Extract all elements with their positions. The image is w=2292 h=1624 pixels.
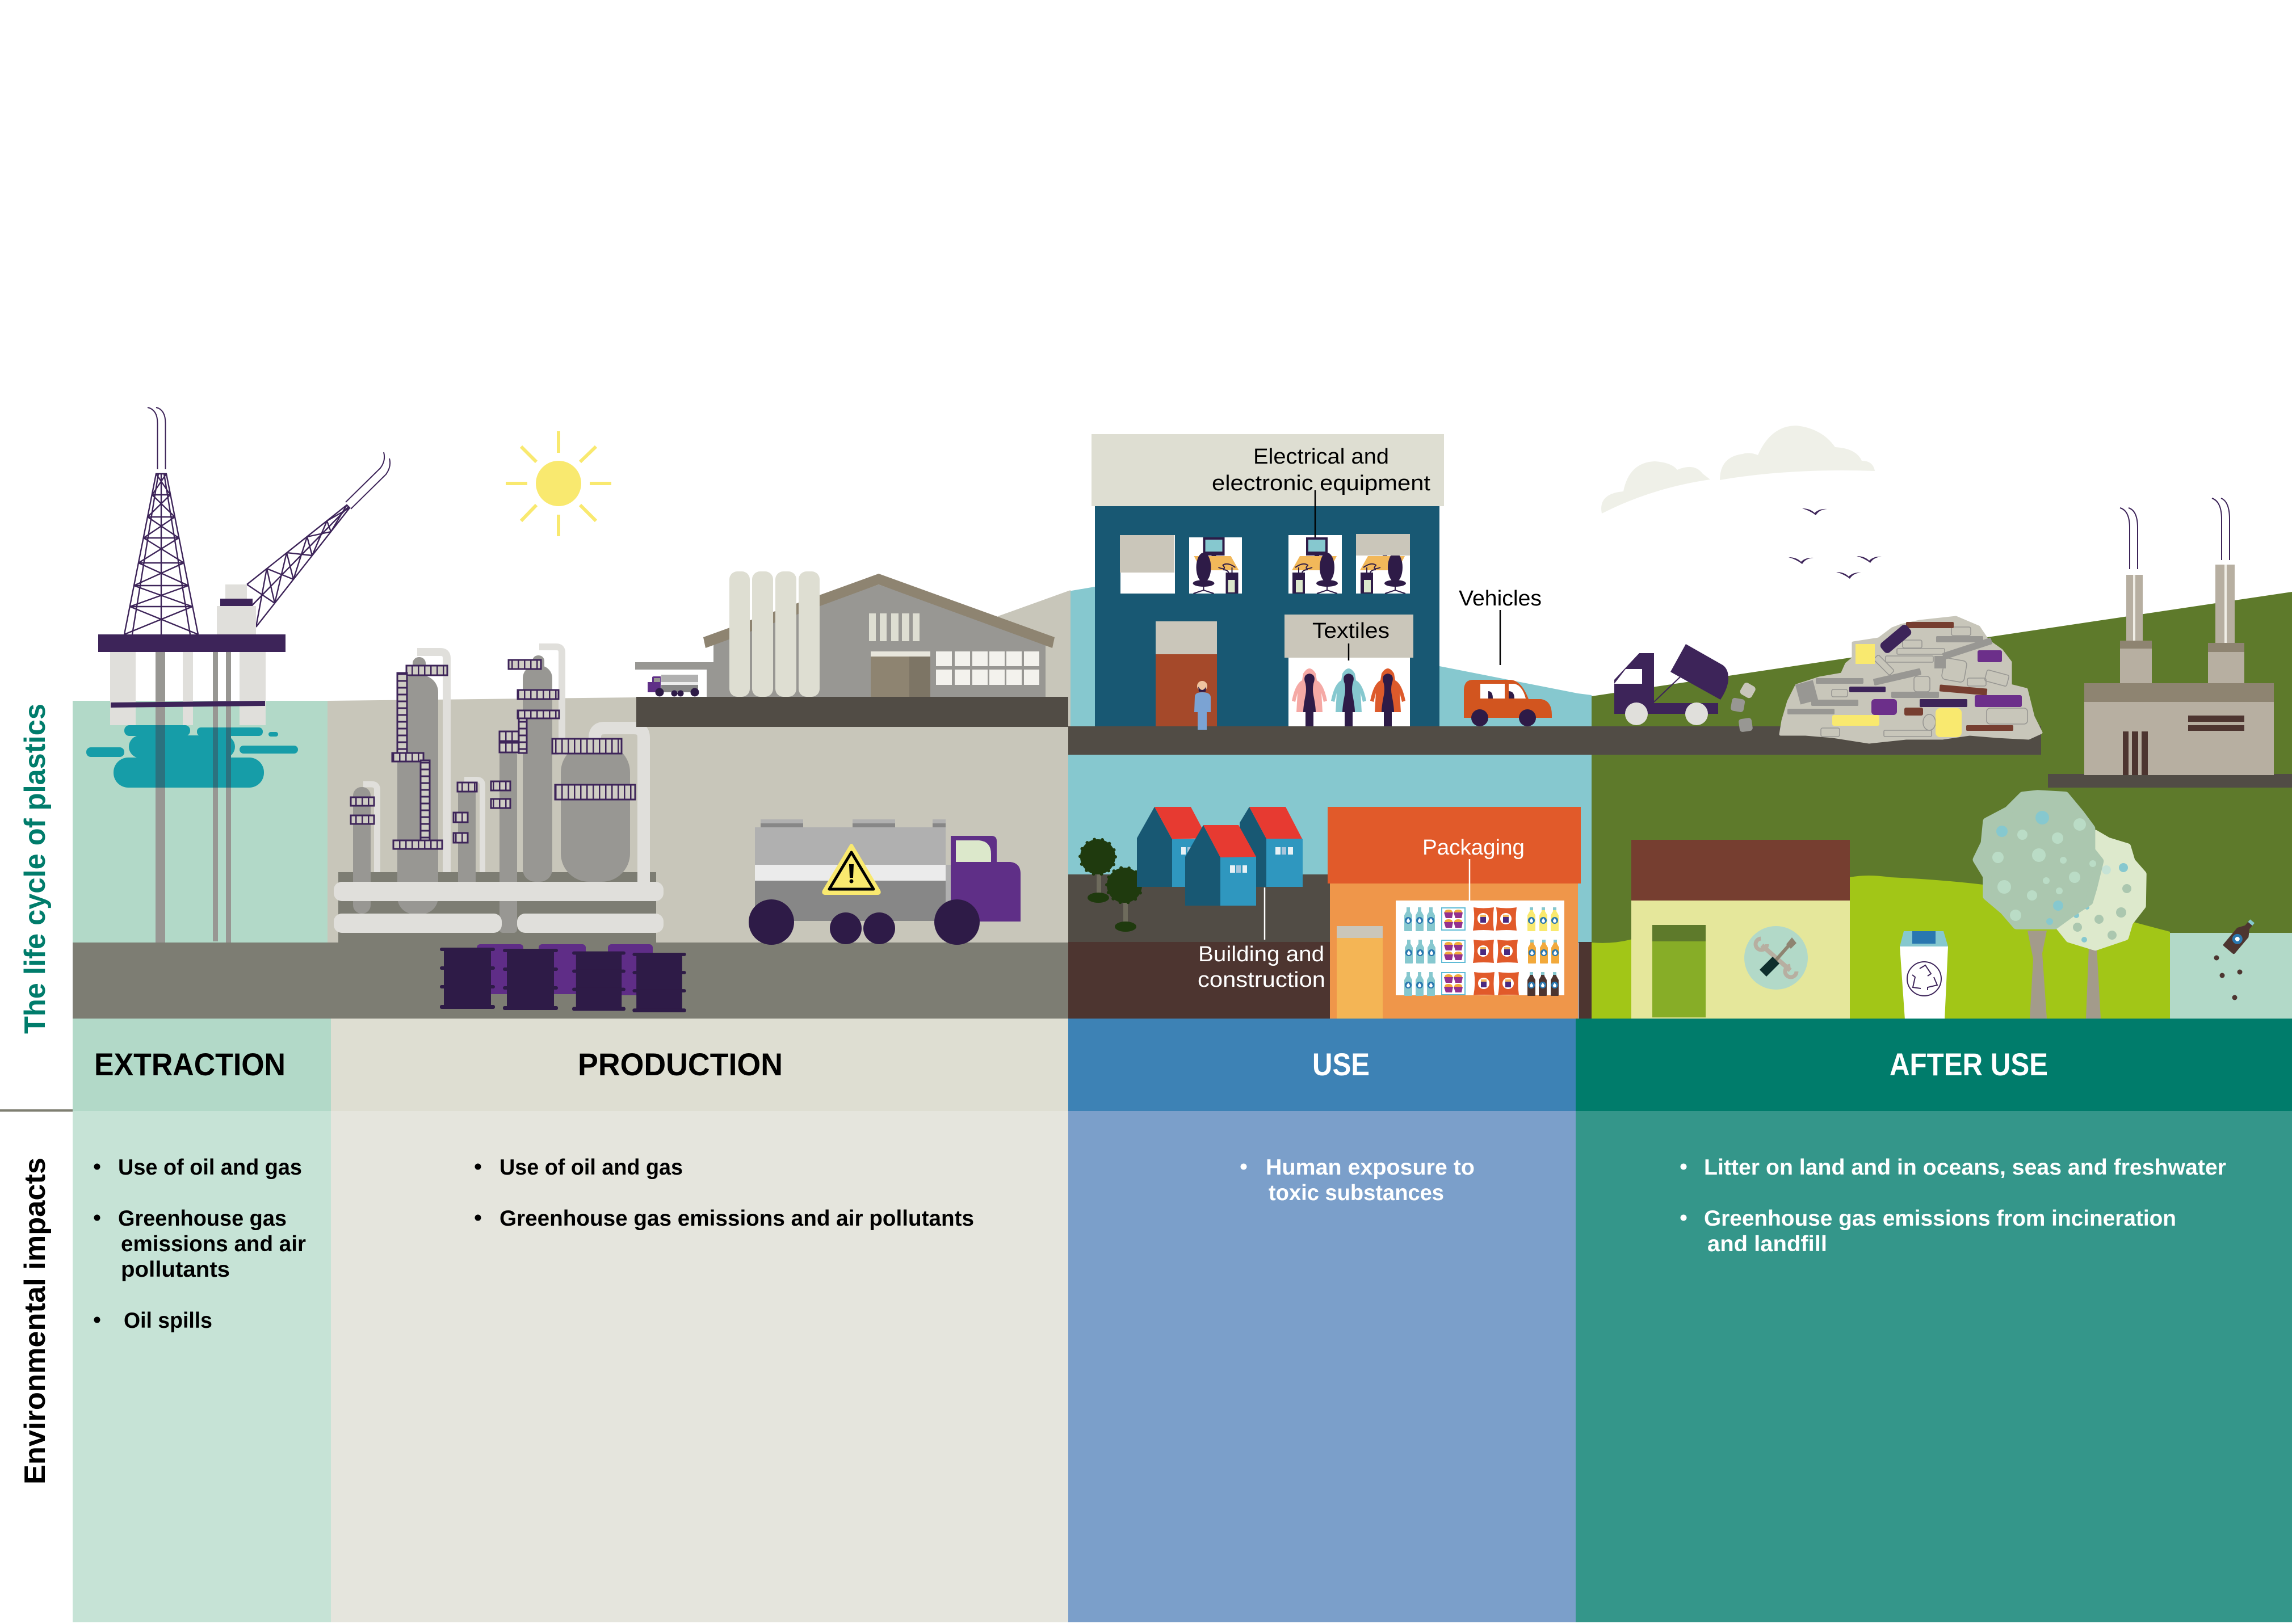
tanker cab — [951, 836, 1021, 922]
repair shop walls — [1631, 901, 1850, 1019]
grey waste items — [1787, 636, 1993, 714]
window: computer right — [1356, 534, 1410, 594]
jacket teal — [1331, 668, 1366, 726]
textile sign — [1284, 615, 1413, 658]
houses — [1137, 807, 1303, 906]
panel: after use column — [1576, 1019, 2292, 1622]
waste pile — [1781, 617, 2041, 742]
derrick tower — [124, 474, 198, 634]
impacts: production: Greenhouse gas emissions and air pollutants — [499, 1206, 974, 1231]
shop door — [1337, 926, 1383, 1019]
oil rig — [98, 407, 390, 943]
yellow bottles — [1527, 907, 1559, 931]
refinery — [334, 647, 664, 943]
rig drill pipes — [156, 652, 231, 943]
shop roof — [1328, 807, 1581, 883]
crane exhaust — [346, 452, 390, 509]
dark front barrels — [440, 948, 686, 1012]
icon: hazard warning sign — [824, 845, 879, 893]
window with blind — [1120, 535, 1175, 594]
after use header — [1576, 1019, 2292, 1111]
refinery back pipes — [363, 647, 562, 872]
impacts: after use: Litter on land and in oceans, seas and freshwater — [1704, 1155, 2226, 1180]
repair shop roof — [1631, 840, 1850, 901]
factory body — [713, 584, 1046, 697]
icon: sun — [506, 431, 611, 536]
impacts: use: Human exposure to — [1266, 1155, 1475, 1180]
small pale tree — [2058, 833, 2143, 1019]
factory vents — [869, 613, 920, 641]
refinery base plate — [338, 872, 656, 943]
pile mound — [1781, 617, 2041, 742]
falling debris — [1730, 681, 1757, 733]
side heading: the life cycle of plastics: The life cycle of plastics — [19, 704, 52, 1034]
littered bottle and fragments — [2214, 916, 2258, 1000]
shop door — [1156, 621, 1217, 726]
tanker wheels — [749, 899, 980, 945]
tanker hatches — [761, 819, 946, 827]
purple back barrels — [477, 944, 653, 995]
after use body — [1576, 1111, 2292, 1622]
derrick exhaust — [148, 407, 166, 469]
production body — [331, 1111, 1068, 1622]
label: vehicles: Vehicles — [1459, 587, 1542, 611]
impacts: extraction: Greenhouse gas — [118, 1206, 287, 1231]
recycling bin — [1900, 931, 1948, 1020]
crane boom — [247, 505, 350, 627]
panel: use backdrop — [1068, 587, 1592, 943]
side heading: environmental impacts: Environmental impacts — [19, 1158, 52, 1484]
production header — [331, 1019, 1068, 1111]
hill behind factory — [998, 590, 1071, 727]
rig band — [111, 701, 265, 708]
label: building and construction — [1198, 887, 1325, 992]
truck cab — [1614, 653, 1718, 714]
use body — [1068, 1111, 1576, 1622]
office building — [1092, 434, 1444, 730]
coloured waste items — [1832, 622, 2022, 737]
impacts: use: toxic substances — [1269, 1181, 1444, 1205]
label: electrical and electronic equipment — [1212, 445, 1430, 537]
snack bags — [1473, 907, 1519, 995]
shop shelf — [1396, 901, 1564, 996]
label: building and construction: Building and — [1198, 943, 1324, 966]
grey sea floor — [73, 943, 1068, 1019]
brown bottles — [1527, 972, 1559, 996]
factory ground — [636, 697, 1068, 727]
truck wheels — [1625, 702, 1708, 725]
panel: after-use green hill — [1592, 592, 2292, 1019]
textile shop window — [1284, 615, 1413, 726]
impacts: after use: and landfill — [1707, 1232, 1827, 1256]
truck bed — [1670, 644, 1728, 700]
incinerator plant — [2048, 498, 2292, 788]
label: packaging: Packaging — [1422, 836, 1525, 860]
impacts: after use: Greenhouse gas emissions from incineration — [1704, 1206, 2176, 1231]
clouds — [1601, 426, 1875, 514]
panel: extraction column — [73, 1019, 331, 1622]
plant ground — [2048, 774, 2292, 788]
label: textiles: Textiles — [1312, 619, 1390, 643]
oil barrels — [440, 944, 686, 1012]
chimney smoke — [2120, 498, 2230, 569]
extraction header — [73, 1019, 331, 1111]
panel: production backdrop — [328, 697, 1068, 943]
refinery main pipes — [334, 882, 664, 933]
large tree — [1977, 794, 2100, 1019]
panel: use column — [1068, 1019, 1576, 1622]
repair shop door — [1652, 925, 1706, 1017]
impacts: extraction — [94, 1155, 306, 1333]
car — [1464, 680, 1552, 726]
factory door — [871, 651, 930, 697]
crane house — [217, 584, 256, 634]
factory windows — [936, 651, 1039, 685]
window: computer left — [1189, 537, 1242, 594]
icon: oil spill — [86, 725, 298, 788]
pale water, after use — [2170, 933, 2292, 1019]
heading: after use: AFTER USE — [1890, 1046, 2048, 1082]
icon: recycling symbol — [1907, 962, 1941, 996]
jacket pink — [1292, 668, 1327, 726]
impacts: production: Use of oil and gas — [499, 1155, 683, 1180]
rig legs — [110, 652, 266, 725]
trees, construction area — [1080, 839, 1142, 932]
factory — [635, 571, 1055, 697]
construction ground — [1068, 874, 1592, 1019]
impacts: extraction: Use of oil and gas — [118, 1155, 302, 1180]
house left — [1137, 807, 1220, 887]
tanker cab window — [956, 840, 991, 862]
impacts: production — [475, 1155, 974, 1231]
packaging shop — [1328, 807, 1581, 1019]
house front — [1185, 825, 1256, 906]
label: electrical and electronic equipment: Electrical and — [1253, 445, 1389, 469]
impacts: extraction: Oil spills — [124, 1309, 212, 1333]
outlined waste items — [1821, 627, 2027, 737]
tanker body — [755, 827, 951, 921]
muffin boxes — [1442, 908, 1465, 995]
silos — [729, 571, 820, 697]
shop front wall — [1330, 883, 1578, 1019]
large tanker truck — [749, 819, 1021, 945]
teal bottles — [1404, 907, 1435, 996]
heading: production: PRODUCTION — [578, 1046, 783, 1082]
label: building and construction: construction — [1198, 968, 1325, 992]
jacket orange — [1370, 668, 1405, 726]
building wall — [1095, 506, 1439, 726]
heading: use: USE — [1312, 1046, 1370, 1082]
impacts: after use — [1680, 1155, 2226, 1256]
plant chimneys — [2120, 565, 2244, 683]
house right — [1240, 807, 1303, 887]
dump truck — [1614, 644, 1757, 733]
person — [1194, 681, 1211, 730]
refinery front pipe — [595, 728, 644, 882]
factory roof — [703, 574, 1055, 648]
panel: extraction water — [73, 701, 328, 943]
repair shop — [1631, 840, 1850, 1019]
building sign — [1092, 434, 1444, 506]
label: electrical and electronic equipment: electronic equipment — [1212, 472, 1430, 495]
refinery platforms — [351, 660, 635, 849]
rig deck — [98, 634, 286, 652]
icon: repair tools — [1744, 926, 1808, 990]
plant body — [2084, 683, 2274, 775]
impacts: use — [1241, 1155, 1475, 1205]
refinery towers — [353, 655, 630, 933]
use header — [1068, 1019, 1576, 1111]
impacts: extraction: emissions and air — [121, 1232, 306, 1256]
factory canopy — [635, 662, 715, 697]
panel: production column — [331, 1019, 1068, 1622]
birds — [1789, 508, 1882, 579]
label: textiles — [1312, 619, 1390, 660]
lime meadow — [1592, 876, 2170, 1019]
impacts: extraction: pollutants — [121, 1257, 230, 1282]
small tanker truck — [648, 675, 699, 697]
heading: extraction: EXTRACTION — [94, 1046, 286, 1082]
window: computer centre — [1288, 535, 1342, 594]
orange bottles — [1528, 940, 1559, 964]
road — [1068, 726, 2041, 755]
extraction body — [73, 1111, 331, 1622]
plant doors and vents — [2123, 716, 2244, 775]
